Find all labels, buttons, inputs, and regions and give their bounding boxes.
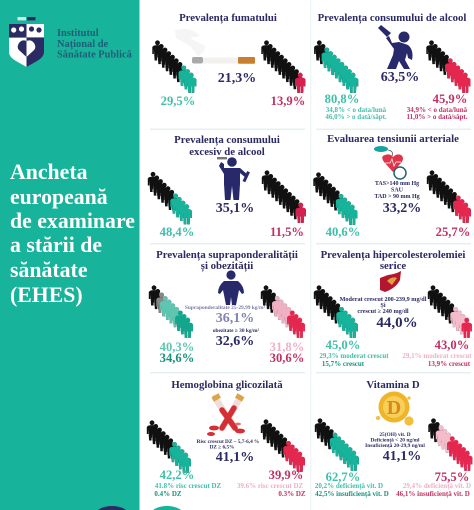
panel: blood pressure: 40,6% (326, 225, 360, 239)
people left (314, 285, 358, 338)
panel: excessive alcohol (148, 134, 306, 239)
people left (152, 40, 196, 93)
panel: vitamin D: 25(OH) vit. D (379, 431, 411, 438)
panel: hypercholesterolemia: Moderat crescut 200-239,9 mg/dl (340, 296, 427, 303)
people left (148, 172, 192, 224)
panel: overweight and obesity: 34,6% (160, 351, 194, 365)
panel: overweight and obesity: 36,1% (216, 311, 254, 326)
panel: blood pressure: 25,7% (436, 225, 470, 239)
panel: vitamin D (315, 379, 472, 498)
heading: Evaluarea tensiunii arteriale (327, 133, 459, 145)
main title: (EHES) (10, 283, 83, 307)
panel: alcohol: 63,5% (381, 70, 419, 85)
panel: overweight and obesity (149, 249, 305, 365)
panel: glycated hemoglobin: 42,2% (160, 468, 194, 482)
icon: vitamin D capsule: D (387, 397, 401, 419)
panel: excessive alcohol: 11,5% (270, 225, 304, 239)
people right (426, 40, 470, 93)
panel: glycated hemoglobin: 0.4% DZ (154, 490, 182, 498)
panel: glycated hemoglobin: 39.6% risc crescut DZ (237, 482, 304, 490)
panel: glycated hemoglobin: 41.8% risc crescut DZ (155, 482, 222, 490)
heading: Prevalența hipercolesterolemiei (321, 249, 465, 261)
heading: Vitamina D (366, 379, 420, 391)
icon: drinker (378, 25, 412, 69)
panel: vitamin D: 41,1% (383, 449, 421, 464)
panel: vitamin D: 62,7% (326, 470, 360, 484)
panel: glycated hemoglobin: DZ ≥ 6,5% (210, 444, 234, 450)
panel: glycated hemoglobin: 41,1% (216, 450, 254, 465)
panel: hypercholesterolemia: 45,0% (326, 338, 360, 352)
panel: vitamin D: 42,5% insuficiență vit. D (315, 490, 389, 498)
panel: smoking: 21,3% (218, 71, 256, 86)
panel: smoking: 13,9% (271, 94, 305, 108)
logo text: Sănătate Publică (57, 50, 133, 60)
people right (261, 419, 305, 472)
panel: vitamin D: Deficiență < 20 ng/ml (370, 438, 420, 444)
panel: hypercholesterolemia (314, 249, 472, 368)
panel: alcohol (314, 12, 470, 121)
people left (314, 40, 358, 93)
panel: overweight and obesity: 30,6% (270, 351, 304, 365)
main title: Ancheta (10, 160, 88, 184)
main title: europeană (10, 185, 108, 209)
panel: excessive alcohol: 48,4% (160, 225, 194, 239)
people left (147, 420, 191, 473)
panel: overweight and obesity: Supraponderalitate 25-29,99 kg/m² (185, 305, 265, 311)
panel: hypercholesterolemia: 13,9% crescut (428, 360, 471, 368)
logo text (57, 28, 133, 60)
panel: overweight and obesity: 32,6% (216, 334, 254, 349)
icon: cigarette (175, 29, 255, 64)
main title: sănătate (10, 258, 88, 282)
panel: vitamin D: 29,4% deficiență vit. D (403, 482, 471, 490)
heading: Prevalența consumului de alcool (318, 12, 466, 24)
people left (149, 285, 193, 338)
panel: overweight and obesity: 31,8% (270, 340, 304, 354)
main title (10, 160, 135, 307)
people right (261, 40, 305, 93)
panel: hypercholesterolemia: 15,7% crescut (322, 360, 365, 368)
main title: de examinare (10, 209, 135, 233)
panel: glycated hemoglobin: 39,9% (269, 468, 303, 482)
panel: vitamin D: 46,1% insuficiență vit. D (396, 490, 470, 498)
panel: hypercholesterolemia: 44,0% (376, 315, 418, 331)
heading (174, 134, 280, 158)
heading (156, 249, 298, 272)
heading: Prevalența fumatului (179, 12, 277, 24)
panel: hypercholesterolemia: Și (380, 302, 386, 309)
panel: alcohol: 46,0% > o dată/săpt. (325, 113, 387, 121)
logo text: Național de (57, 39, 108, 50)
panel: vitamin D: 20,2% deficiență vit. D (315, 482, 383, 490)
panel: alcohol: 11,0% > o dată/săpt. (407, 113, 468, 121)
logo text: Institutul (57, 28, 99, 39)
bottom ellipse (96, 506, 128, 510)
people right (261, 285, 305, 338)
panel: smoking (152, 12, 305, 108)
panel: blood pressure (313, 133, 471, 239)
panel: overweight and obesity: obezitate ≥ 30 kg/m² (213, 328, 260, 334)
heading: și obezității (201, 260, 253, 272)
people right (428, 418, 472, 471)
icon: vitamin D capsule (376, 392, 414, 426)
icon: heart and pressure gauge (374, 146, 406, 179)
heading (321, 249, 465, 272)
panel: vitamin D: Insuficiență 20-29,9 ng/ml (365, 443, 425, 449)
heading: serice (380, 260, 406, 272)
people right (427, 170, 471, 223)
panel: alcohol: 34,8% < o data/lună (326, 106, 387, 114)
panel: alcohol: 45,9% (433, 92, 467, 106)
people right (262, 170, 306, 223)
panel: hypercholesterolemia: 29,1% moderat crescut (402, 352, 472, 360)
panel: glycated hemoglobin (147, 379, 306, 510)
panel: smoking: 29,5% (161, 94, 195, 108)
icon: obese figure (218, 270, 244, 305)
panel: glycated hemoglobin: 0.3% DZ (278, 490, 306, 498)
blood pressure thresholds: TAD > 90 mm Hg (374, 194, 420, 200)
left teal panel (0, 0, 140, 510)
people right (428, 285, 472, 338)
panel: hypercholesterolemia: 43,0% (435, 338, 469, 352)
panel: blood pressure: 33,2% (383, 201, 421, 216)
panel: hypercholesterolemia: 29,3% moderat crescut (319, 352, 389, 360)
people left (313, 172, 357, 225)
heading: Hemoglobina glicozilată (171, 379, 283, 391)
panel: alcohol: 34,9% < o data/lună (407, 106, 468, 114)
panel: excessive alcohol: 35,1% (216, 201, 254, 216)
logo shield (9, 17, 44, 67)
panel: glycated hemoglobin: Risc crescut DZ – 5,7-6,4 % (197, 439, 259, 445)
blood pressure thresholds (374, 181, 420, 200)
heading: Prevalența supraponderalității (156, 249, 298, 261)
heading: excesiv de alcool (189, 146, 265, 158)
heading: Prevalența consumului (174, 134, 280, 146)
blood pressure thresholds: SAU (391, 188, 404, 194)
icon: standing drinker (217, 157, 250, 200)
panel: hypercholesterolemia: crescut ≥ 240 mg/dl (357, 308, 409, 315)
bottom ellipse (151, 506, 183, 510)
panel: overweight and obesity: 40,3% (160, 340, 194, 354)
icon: test tubes (207, 393, 245, 436)
panel: alcohol: 80,8% (325, 92, 359, 106)
blood pressure thresholds: TAS>140 mm Hg (375, 181, 419, 187)
panel: vitamin D: 75,5% (435, 470, 469, 484)
icon: artery (380, 271, 401, 292)
people left (315, 418, 359, 471)
main title: a stării de (10, 233, 102, 257)
